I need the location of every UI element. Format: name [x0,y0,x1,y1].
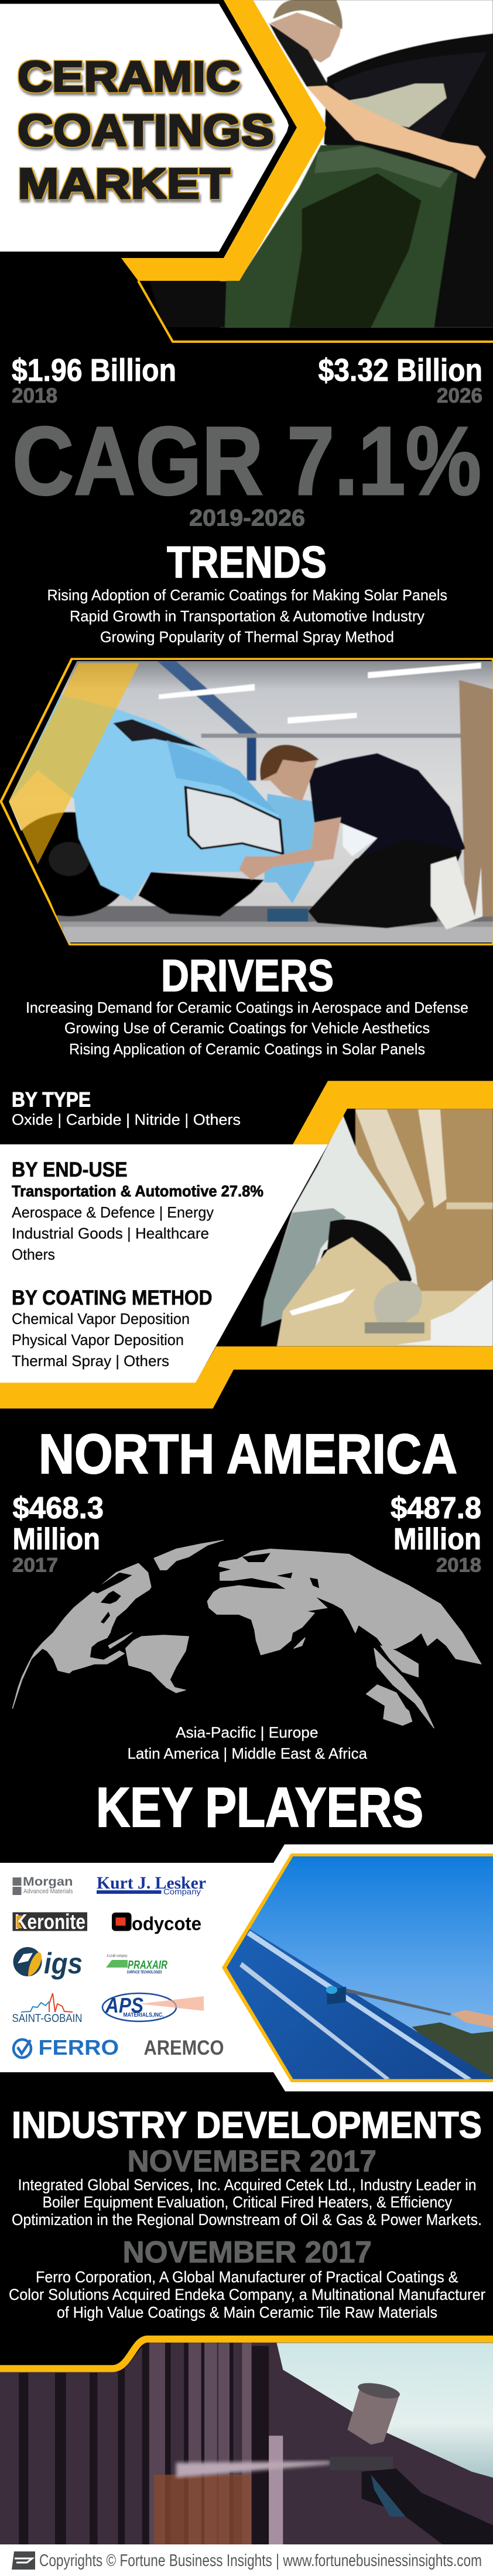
development 2: NOVEMBER 2017 [123,2235,372,2269]
by end-use: Industrial Goods | Healthcare [12,1225,209,1242]
other regions: Latin America | Middle East & Africa [128,1745,368,1762]
icon: Fortune Business Insights logo [12,2551,35,2570]
regional value 2017: Million [13,1522,100,1556]
by end-use: Aerospace & Defence | Energy [12,1203,214,1221]
other regions [128,1724,368,1762]
CAGR headline: 2019-2026 [189,505,305,531]
by type: Oxide | Carbide | Nitride | Others [12,1111,241,1129]
by end-use: Transportation & Automotive 27.8% [12,1182,263,1200]
regional value 2018: $487.8 [391,1491,481,1525]
logo: Praxair: A Linde company [107,1954,128,1958]
development 1 [12,2145,482,2228]
regional value 2018: 2018 [436,1554,481,1576]
regional value 2018 [391,1491,481,1576]
trends list: Rapid Growth in Transportation & Automotive Industry [70,607,424,625]
regional value 2017: 2017 [12,1554,58,1576]
regional value 2018: Million [393,1522,481,1556]
title [18,53,274,208]
logo: Praxair: SURFACE TECHNOLOGIES [126,1970,162,1975]
other regions: Asia-Pacific | Europe [176,1724,319,1741]
title: COATINGS [18,106,274,156]
title: MARKET [18,160,230,208]
logo: IGS [13,1947,83,1980]
logo: Ferro: FERRO [39,2035,119,2059]
market value 2026: 2026 [437,384,482,407]
footer [0,2544,493,2576]
by coating method [12,1287,212,1370]
market value 2018 [12,353,176,407]
logo: Saint-Gobain [12,1993,82,2025]
by type [12,1088,241,1129]
logo: Morgan [13,1875,73,1895]
yellow band and white panel: segmentation [0,1081,493,1409]
photo: spray painting a car wheel arch [260,1109,493,1347]
by type: BY TYPE [12,1088,91,1112]
logo: APS Materials: MATERIALS,INC. [123,2012,164,2018]
development 1: NOVEMBER 2017 [128,2145,376,2179]
by coating method: Physical Vapor Deposition [12,1331,184,1349]
by coating method: Thermal Spray | Others [12,1352,169,1370]
photo: spray gun coating a fence [0,2343,493,2545]
by coating method: Chemical Vapor Deposition [12,1310,190,1327]
drivers list [26,999,468,1058]
logo: Kurt J. Lesker: Company [163,1887,201,1896]
market value 2018: $1.96 Billion [12,353,176,388]
trends heading: TRENDS [167,538,327,587]
trends list: Growing Popularity of Thermal Spray Method [100,628,394,646]
drivers list: Growing Use of Ceramic Coatings for Vehicle Aesthetics [64,1019,430,1037]
key players heading: KEY PLAYERS [96,1776,423,1839]
trends list [47,586,447,646]
by end-use: BY END-USE [12,1158,128,1181]
development 2: of High Value Coatings & Main Ceramic Tile Raw Materials [57,2304,437,2322]
logo: Aremco: AREMCO [144,2037,224,2059]
yellow wave divider [0,2339,493,2368]
development 1: Boiler Equipment Evaluation, Critical Fired Heaters, & Efficiency [42,2193,452,2211]
by end-use: Others [12,1246,55,1263]
by coating method: BY COATING METHOD [12,1287,212,1309]
logo: APS Materials [102,1993,204,2021]
header black masks and yellow chevron [0,0,493,365]
title: CERAMIC [18,53,240,101]
logo: Morgan: Morgan [23,1875,73,1889]
market value 2026 [319,353,482,407]
header photo: man fitting film on a car door [149,0,493,328]
regional value 2017 [12,1491,104,1576]
logo: Praxair [106,1954,167,1975]
development 2 [9,2235,485,2322]
photo: technician wrapping a blue car [0,655,493,945]
logo: Keronite: Keronite [15,1910,85,1934]
logo: APS Materials: APS [105,1993,143,2017]
logo: Kurt J. Lesker: Kurt J. Lesker [97,1873,206,1893]
drivers heading: DRIVERS [161,951,334,1001]
regional value 2017: $468.3 [13,1491,104,1525]
panel: white title hexagon [0,4,289,252]
logo: Saint-Gobain: SAINT-GOBAIN [12,2013,82,2025]
world map globe [12,1540,481,1728]
drivers list: Rising Application of Ceramic Coatings in Solar Panels [69,1040,425,1058]
market value 2018: 2018 [12,384,57,407]
logo: IGS: igs [44,1947,83,1980]
logo: Morgan: Advanced Materials [23,1888,73,1895]
by end-use [12,1158,263,1263]
logos [12,1873,224,2059]
logo: Bodycote: odycote [132,1913,201,1934]
photo: cleaning a solar panel [222,1853,493,2082]
drivers list: Increasing Demand for Ceramic Coatings in Aerospace and Defense [26,999,468,1016]
development 2: Ferro Corporation, A Global Manufacturer of Practical Coatings & [36,2268,458,2286]
trends list: Rising Adoption of Ceramic Coatings for Making Solar Panels [47,586,447,604]
logo: Praxair: PRAXAIR [128,1959,167,1972]
panel: white logo band [0,1844,493,2092]
